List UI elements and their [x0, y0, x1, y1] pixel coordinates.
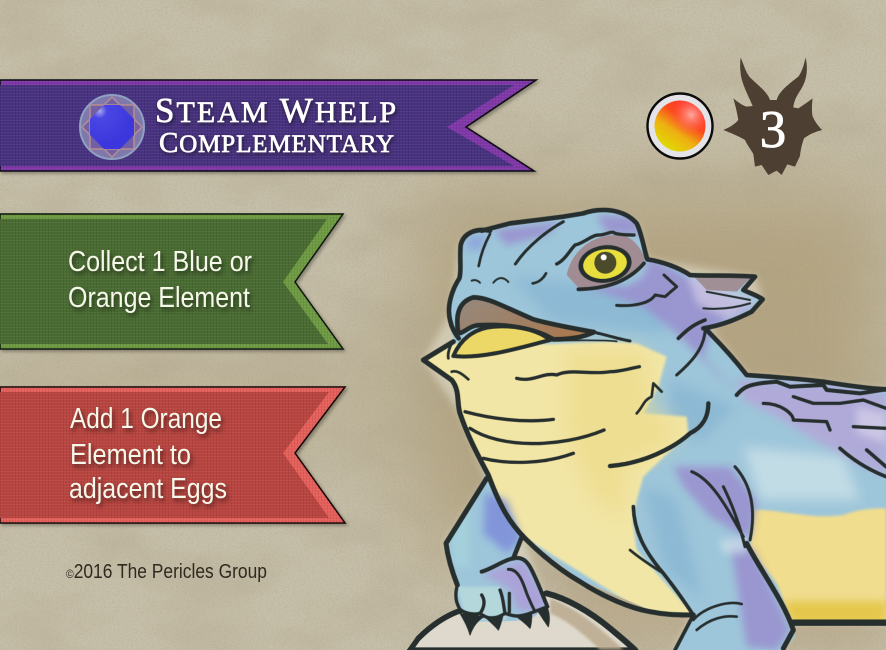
green action banner: Orange Element	[68, 282, 250, 314]
pale halo	[423, 213, 886, 650]
ink details	[448, 222, 886, 635]
ink outlines	[418, 210, 886, 650]
red ribbon	[0, 387, 345, 523]
yellow throat and chest	[423, 342, 693, 615]
pale highlights	[450, 273, 886, 620]
subtitle: COMPLEMENTARY	[159, 127, 394, 159]
copyright: ©2016 The Pericles Group	[66, 561, 267, 583]
mouth	[453, 297, 594, 357]
red action banner: Element to	[70, 439, 191, 471]
title banner	[0, 80, 536, 171]
lower jaw	[453, 326, 550, 357]
purple washes	[467, 215, 886, 650]
illustration: lizard on rock	[410, 200, 886, 650]
dragon head cost badge	[723, 58, 822, 175]
green text: Collect 1 Blue or	[68, 246, 252, 278]
icon: blue gem	[80, 95, 144, 159]
ear membrane	[693, 276, 750, 292]
icon: dragon head	[723, 58, 822, 175]
eye	[567, 235, 645, 289]
red action banner: adjacent Eggs	[69, 473, 227, 505]
green ribbon	[0, 214, 343, 349]
cost number: 3	[760, 101, 786, 159]
body colours	[410, 200, 886, 650]
title text: STEAM WHELP	[155, 91, 396, 130]
rock	[410, 593, 635, 650]
icon: element orb	[648, 94, 712, 158]
green action banner	[0, 214, 343, 349]
darker teal washes	[510, 277, 737, 600]
red action banner	[0, 387, 345, 523]
title text	[155, 91, 396, 159]
red text: Add 1 Orange	[70, 403, 222, 435]
yellow belly	[750, 508, 886, 623]
